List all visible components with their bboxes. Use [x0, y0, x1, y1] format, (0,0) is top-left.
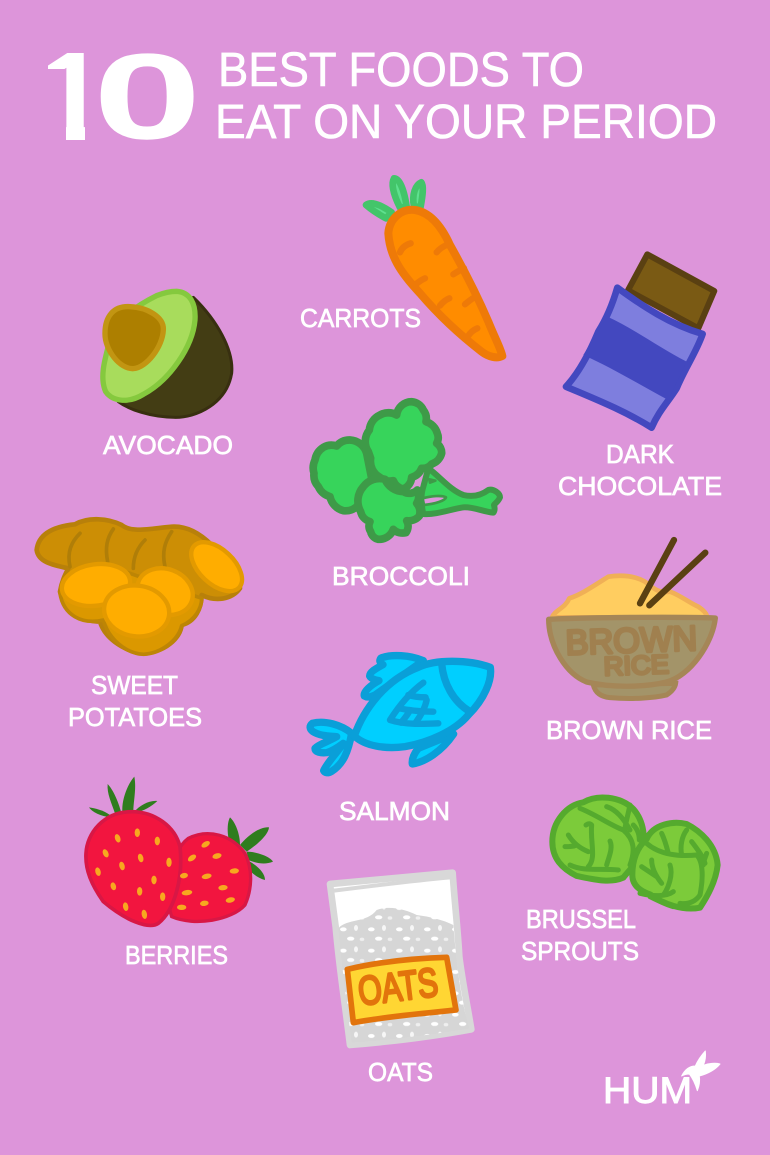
title: 0 [93, 29, 202, 165]
title: EAT ON YOUR PERIOD [215, 96, 717, 149]
label: sweet potatoes [68, 670, 202, 732]
label: sweet potatoes: SWEET [91, 670, 178, 700]
icon: salmon [310, 656, 491, 773]
title: 1 [37, 26, 107, 167]
label: dark chocolate: CHOCOLATE [558, 471, 722, 501]
icon: carrot [366, 178, 502, 357]
title [48, 52, 716, 140]
oats label panel: OATS [355, 959, 440, 1014]
icon: brown rice [549, 540, 715, 698]
logo: HUM [603, 1051, 720, 1111]
label: carrots: CARROTS [300, 303, 421, 333]
icon: sweet potatoes [37, 519, 251, 654]
label: avocado: AVOCADO [103, 430, 233, 460]
label: sweet potatoes: POTATOES [68, 702, 202, 732]
label: brown rice: BROWN RICE [546, 715, 712, 745]
label: brussel sprouts [521, 904, 639, 966]
label: oats: OATS [368, 1057, 433, 1087]
icon: brown rice: RICE [603, 649, 669, 681]
icon: brown rice: BROWN [565, 619, 698, 663]
label: brussel sprouts: BRUSSEL [526, 904, 636, 934]
label: salmon: SALMON [339, 796, 450, 826]
label: berries: BERRIES [125, 940, 228, 970]
label: broccoli: BROCCOLI [332, 561, 470, 591]
icon: oats bag [330, 873, 471, 1045]
label: dark chocolate: DARK [606, 439, 675, 469]
icon: brussel sprouts [552, 797, 718, 909]
title: BEST FOODS TO [218, 44, 584, 97]
icon: avocado [103, 291, 232, 417]
logo: HUM: HUM [603, 1070, 692, 1111]
icon: broccoli [313, 402, 500, 539]
label: brussel sprouts: SPROUTS [521, 936, 639, 966]
icon: dark chocolate [566, 254, 714, 428]
label: dark chocolate [558, 439, 722, 501]
icon: berries [86, 777, 273, 925]
